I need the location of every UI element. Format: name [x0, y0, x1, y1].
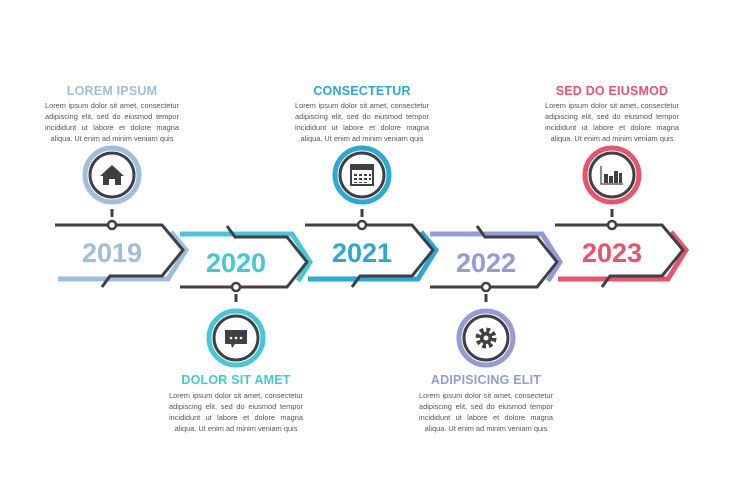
- title: consectetur: CONSECTETUR: [313, 84, 411, 98]
- text: sed do eiusmod: Lorem ipsum dolor sit amet, consectetur adipiscing elit, sed do eiusmod tempor incididunt ut labore et dolore magna aliqua. Ut enim ad minim veniam quis: [545, 101, 679, 143]
- text: dolor sit amet: Lorem ipsum dolor sit amet, consectetur adipiscing elit, sed do eiusmod tempor incididunt ut labore et dolore magna aliqua. Ut enim ad minim veniam quis: [169, 391, 303, 433]
- step 2022: [430, 226, 560, 365]
- title: sed do eiusmod: SED DO EIUSMOD: [556, 84, 668, 98]
- step 2020: [180, 226, 310, 365]
- step 2023: 2023: [582, 238, 642, 268]
- text: consectetur: Lorem ipsum dolor sit amet, consectetur adipiscing elit, sed do eiusmod tempor incididunt ut labore et dolore magna aliqua. Ut enim ad minim veniam quis: [295, 101, 429, 143]
- step 2021: 2021: [332, 238, 392, 268]
- title: lorem ipsum: LOREM IPSUM: [67, 84, 157, 98]
- title: dolor sit amet: DOLOR SIT AMET: [181, 373, 291, 387]
- step 2019: 2019: [82, 238, 142, 268]
- text: adipisicing elit: Lorem ipsum dolor sit amet, consectetur adipiscing elit, sed do eiusmod tempor incididunt ut labore et dolore magna aliqua. Ut enim ad minim veniam quis: [419, 391, 553, 433]
- text: lorem ipsum: Lorem ipsum dolor sit amet, consectetur adipiscing elit, sed do eiusmod tempor incididunt ut labore et dolore magna aliqua. Ut enim ad minim veniam quis: [45, 101, 179, 143]
- step 2021: [305, 148, 436, 287]
- title: adipisicing elit: ADIPISICING ELIT: [431, 373, 541, 387]
- step 2022: 2022: [456, 248, 516, 278]
- step 2020: 2020: [206, 248, 266, 278]
- step 2023: [555, 148, 686, 287]
- step 2019: [55, 148, 186, 287]
